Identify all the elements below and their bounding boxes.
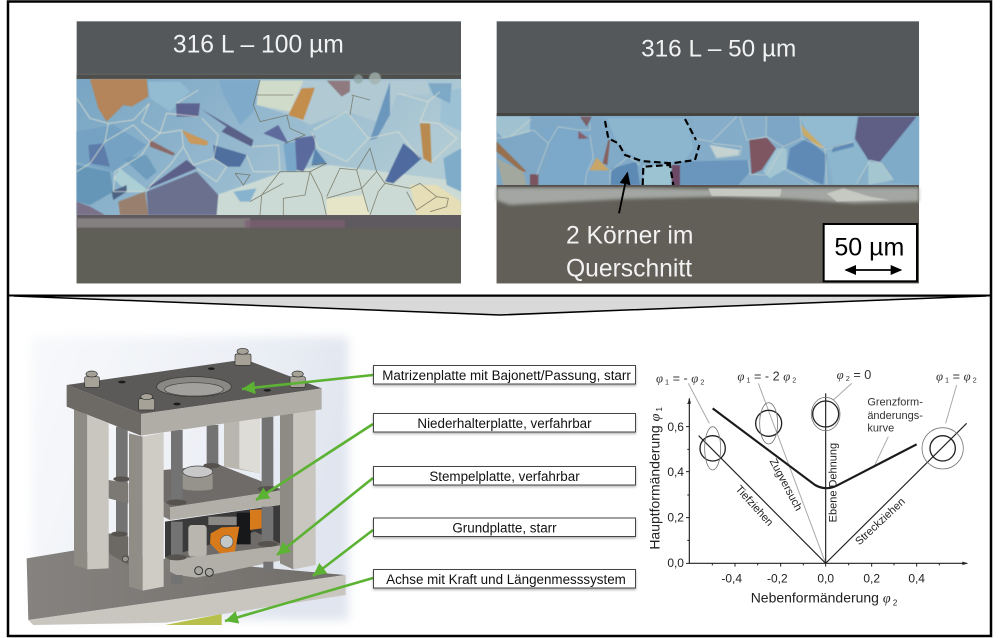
label box: Niederhalterplatte: Niederhalterplatte, verfahrbar bbox=[417, 416, 592, 431]
chart: forming limit diagram: 1 bbox=[655, 406, 664, 414]
panel: micrograph 316 L 100 µm bbox=[77, 21, 461, 283]
y tick labels: 0,4 bbox=[667, 465, 684, 479]
divider with chevron bbox=[8, 296, 991, 315]
panel: micrograph 316 L 50 µm bbox=[497, 21, 919, 283]
formula labels: = 0 bbox=[850, 368, 871, 382]
x tick labels: -0,2 bbox=[767, 572, 788, 586]
right column bbox=[280, 413, 293, 569]
formula labels: φ bbox=[936, 369, 943, 383]
y tick labels: 0,2 bbox=[667, 511, 684, 525]
label: 2 Körner im Querschnitt: 2 Körner im bbox=[566, 222, 693, 249]
formula labels: 1 bbox=[663, 377, 669, 386]
formula labels: φ bbox=[656, 371, 663, 385]
axis titles: 2 bbox=[891, 598, 898, 607]
label box: Niederhalterplatte bbox=[374, 414, 636, 432]
formula labels: 2 bbox=[698, 377, 704, 386]
formula labels: = - 2 bbox=[750, 369, 783, 383]
back columns bbox=[224, 417, 260, 473]
front rods bbox=[171, 430, 183, 502]
formula labels: 1 bbox=[943, 375, 949, 384]
y tick labels: 0,6 bbox=[667, 420, 684, 434]
arrow: grain pointer bbox=[619, 173, 627, 213]
arrow: Stempelplatte bbox=[277, 478, 373, 555]
label box: Achse: Achse mit Kraft und Längenmesssystem bbox=[386, 572, 626, 587]
bolts bbox=[85, 348, 305, 410]
die ring bbox=[183, 466, 213, 491]
formula labels: = - bbox=[669, 371, 691, 385]
formula labels bbox=[656, 368, 977, 386]
x tick labels: 0,4 bbox=[908, 572, 925, 586]
label: 2 Körner im Querschnitt: Querschnitt bbox=[566, 256, 692, 283]
strain circles bbox=[700, 401, 955, 461]
label box: Grundplatte bbox=[374, 518, 636, 536]
curve label: änderungs- bbox=[867, 410, 923, 422]
x tick labels: 0,2 bbox=[863, 572, 880, 586]
formula labels: φ bbox=[737, 369, 744, 383]
die plate bbox=[67, 359, 322, 436]
yellow axis bbox=[165, 614, 222, 625]
arrow: Achse bbox=[225, 578, 373, 621]
arrow: Grundplatte bbox=[313, 530, 373, 576]
base plate bbox=[27, 551, 345, 620]
axes bbox=[689, 398, 967, 563]
path labels bbox=[733, 443, 908, 548]
path labels: Tiefziehen bbox=[733, 483, 775, 529]
axis titles: Nebenformänderung φ bbox=[751, 590, 891, 607]
label box: Matrizenplatte: Matrizenplatte mit Bajonett/Passung, starr bbox=[382, 368, 631, 383]
leader lines bbox=[688, 383, 957, 563]
y tick labels bbox=[667, 420, 684, 570]
formula labels: 2 bbox=[844, 374, 850, 383]
x tick labels: 0,0 bbox=[817, 572, 834, 586]
formula labels: 1 bbox=[744, 375, 750, 384]
back plate edges bbox=[109, 480, 128, 503]
front column bbox=[129, 433, 143, 591]
path labels: Zugversuch bbox=[767, 457, 804, 513]
label box: Stempelplatte bbox=[374, 466, 636, 485]
dashed grain boundary bbox=[605, 119, 699, 185]
curve label: kurve bbox=[867, 423, 894, 435]
chart: forming limit diagram: Hauptformänderung φ bbox=[646, 414, 663, 550]
Stempel plate front bbox=[170, 545, 283, 578]
curves bbox=[713, 408, 917, 488]
path labels: Streckziehen bbox=[853, 496, 908, 548]
3D model: forming tool bbox=[27, 337, 348, 625]
formula labels: 2 bbox=[971, 375, 977, 384]
Niederhalter plate front bbox=[170, 490, 283, 520]
lower mechanism bbox=[165, 505, 280, 563]
path labels: Ebene Dehnung bbox=[828, 443, 840, 522]
formula labels: φ bbox=[837, 368, 844, 382]
label box: Stempelplatte: Stempelplatte, verfahrbar bbox=[429, 469, 580, 484]
heading: 316 L 50 µm: 316 L – 50 µm bbox=[641, 36, 796, 63]
chart: forming limit diagram bbox=[646, 368, 977, 607]
Niederhalter plate top bbox=[163, 465, 283, 507]
curve label: Grenzform- bbox=[867, 397, 923, 409]
y tick labels: 0,0 bbox=[667, 556, 684, 570]
x tick labels bbox=[721, 572, 925, 586]
formula labels: φ bbox=[691, 371, 698, 385]
heading: 316 L 100 µm: 316 L – 100 µm bbox=[173, 32, 344, 59]
formula labels: 2 bbox=[790, 375, 796, 384]
guide rods bbox=[116, 427, 128, 540]
x tick labels: -0,4 bbox=[721, 572, 742, 586]
label box: Grundplatte: Grundplatte, starr bbox=[452, 520, 557, 536]
arrow: Matrizenplatte bbox=[242, 375, 373, 389]
formula labels: = bbox=[949, 369, 964, 383]
scale bar box: 50 µm bbox=[834, 234, 904, 262]
formula labels: φ bbox=[964, 369, 971, 383]
arrow: Niederhalterplatte bbox=[256, 424, 373, 500]
formula labels: φ bbox=[783, 369, 790, 383]
scale bar box bbox=[824, 224, 917, 281]
